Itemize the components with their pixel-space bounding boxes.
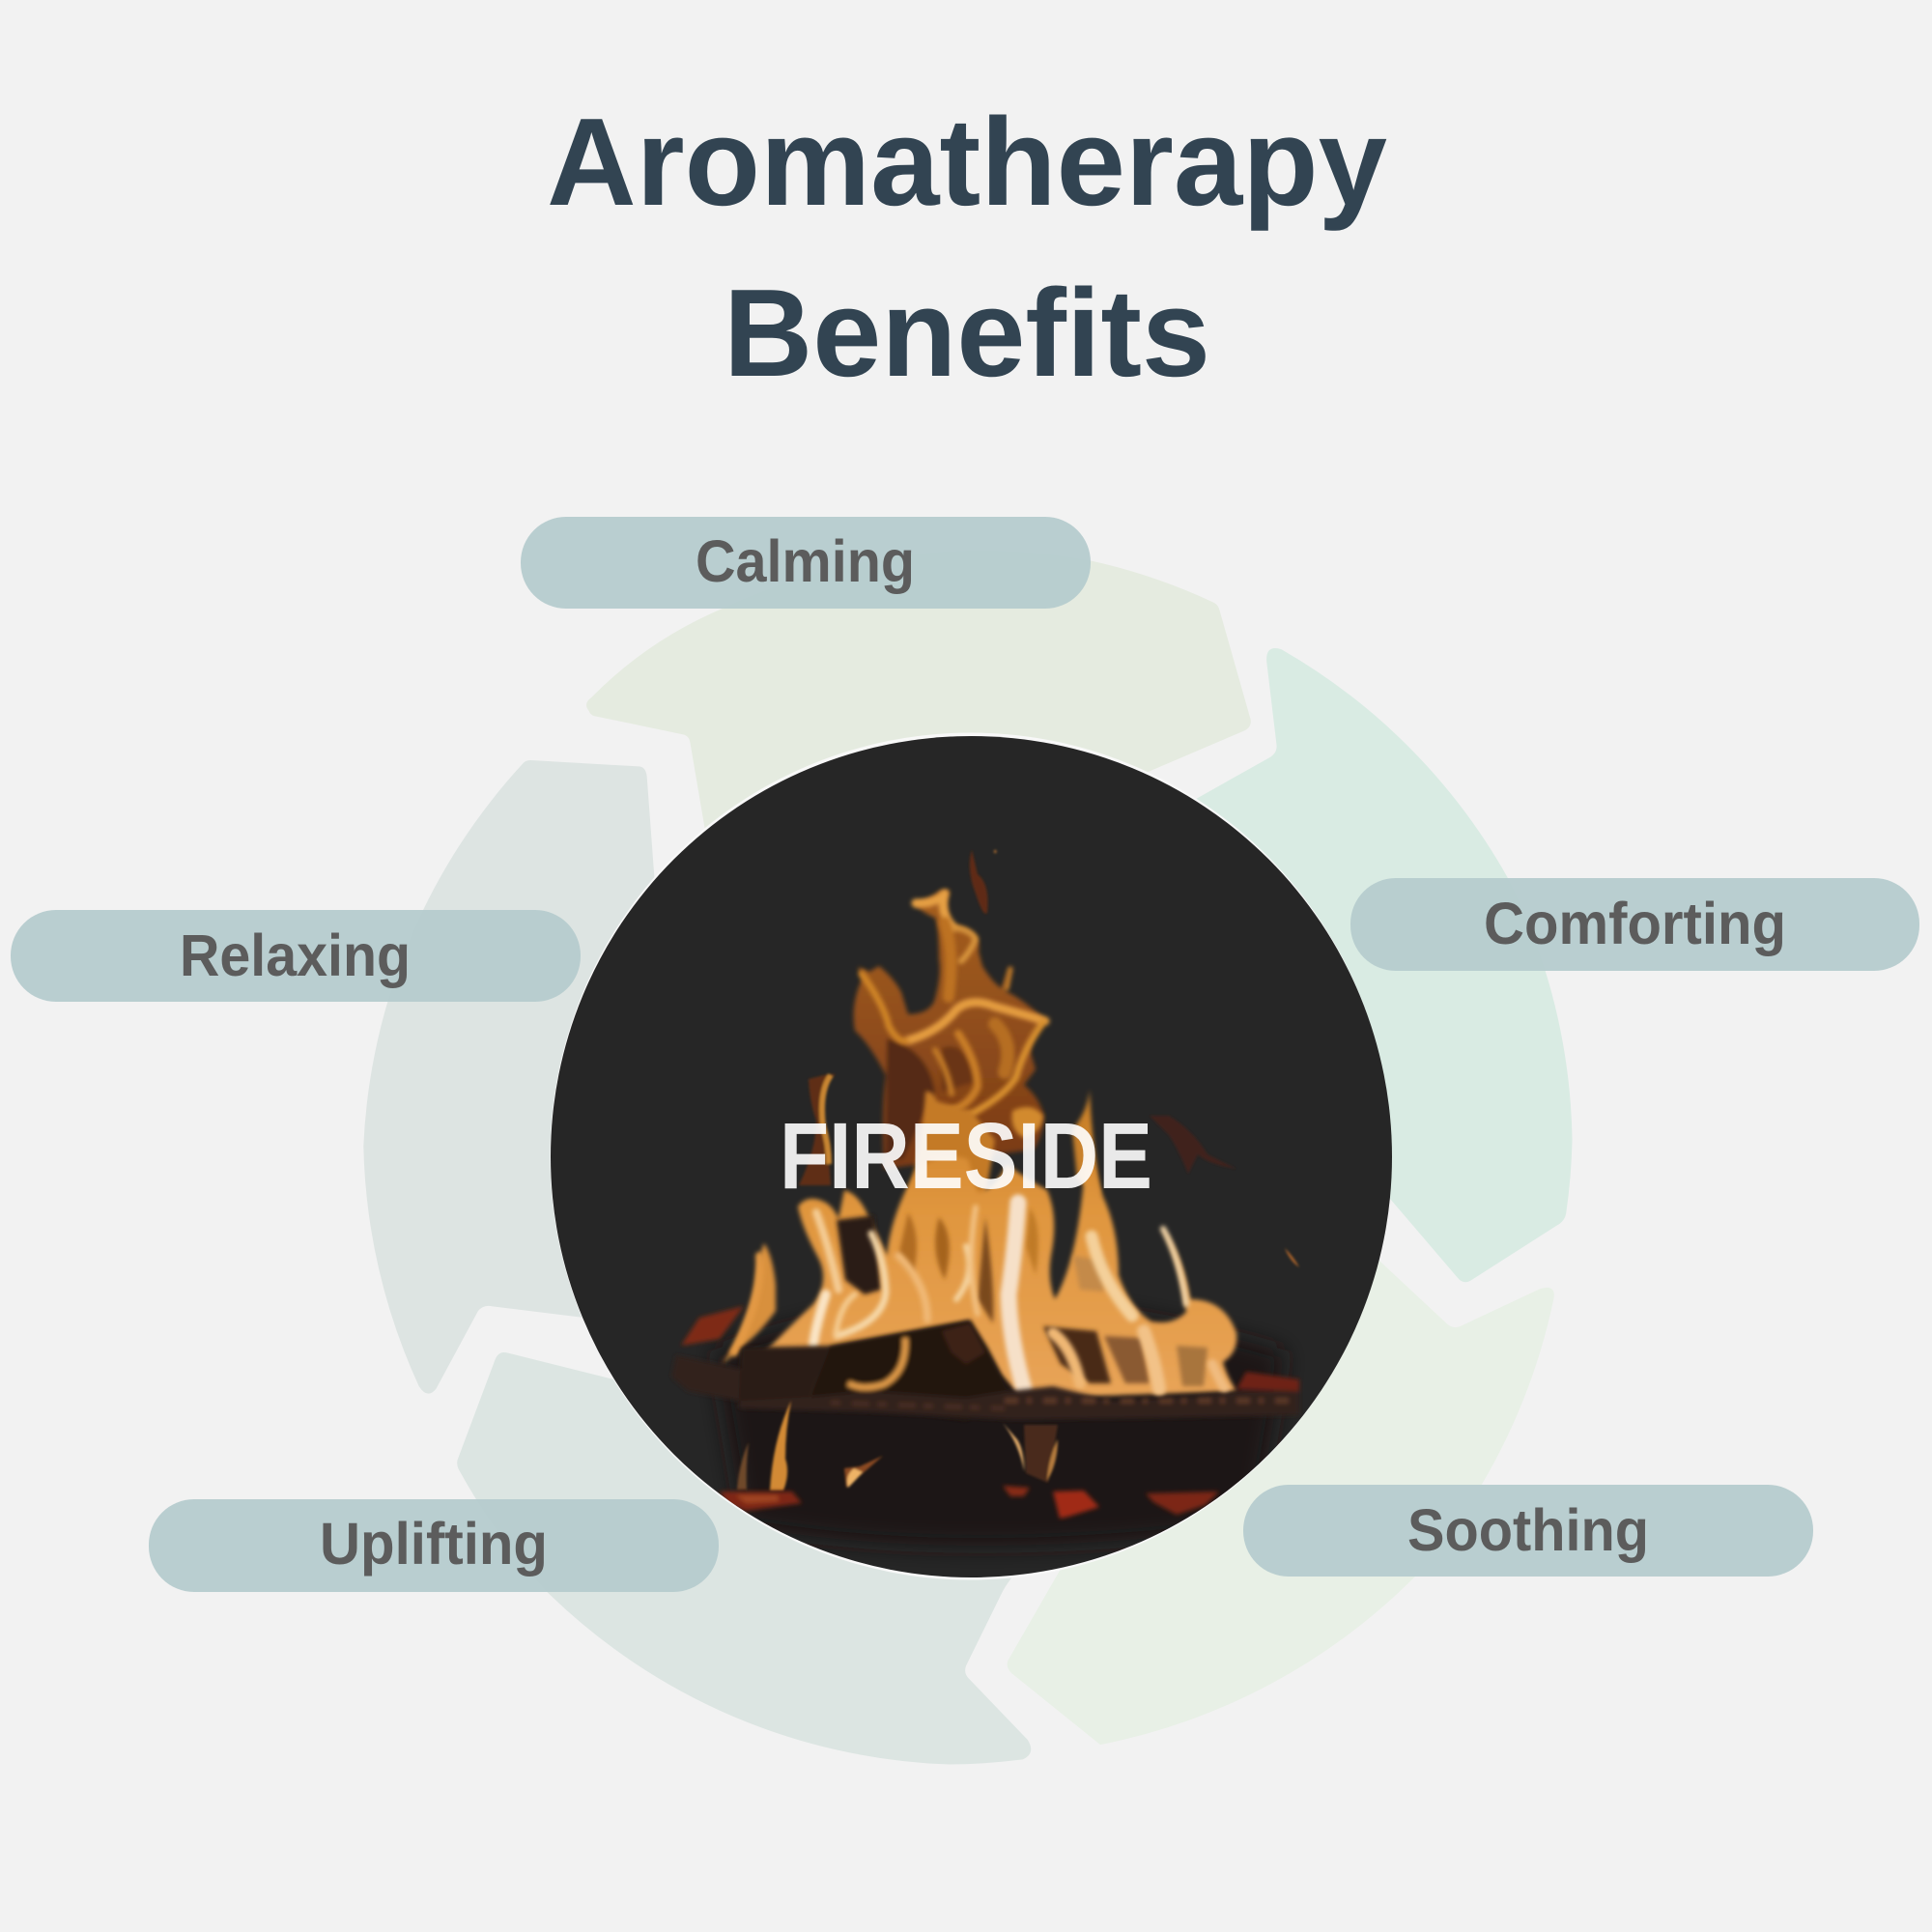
logs xyxy=(671,1306,1299,1420)
arrow: calming segment xyxy=(586,551,1251,850)
arrow: uplifting segment xyxy=(457,1352,1031,1765)
pale rim behind centre circle xyxy=(551,732,1391,1580)
ember glow right of log xyxy=(1236,1372,1299,1391)
flame tongues under log xyxy=(777,1348,821,1401)
lower upper-flame shadow xyxy=(886,1038,935,1159)
dark shadow behind logs xyxy=(715,1304,1285,1546)
pill: Comforting: Comforting xyxy=(1484,891,1786,956)
arrow: soothing segment xyxy=(1008,1238,1554,1745)
arrow: comforting segment xyxy=(1171,648,1573,1282)
pill: Uplifting xyxy=(149,1499,719,1592)
orange blobs above main mass xyxy=(908,1090,1101,1198)
left sliver flame xyxy=(722,1243,776,1365)
small low flames xyxy=(737,1401,1058,1491)
pill: Soothing xyxy=(1243,1485,1813,1577)
pill: Calming: Calming xyxy=(696,528,915,594)
dark disc xyxy=(541,724,1410,1594)
upper flame xyxy=(854,891,1046,1169)
main log xyxy=(809,1318,1009,1399)
title xyxy=(547,93,1387,403)
horizontal log band xyxy=(739,1386,1299,1420)
small spark flames xyxy=(970,850,1299,1267)
centre label: FIRESIDE: FIRESIDE xyxy=(780,1103,1152,1208)
pill: Calming xyxy=(521,517,1091,609)
centre circle: fire image xyxy=(541,724,1410,1594)
pill: Soothing: Soothing xyxy=(1407,1497,1649,1563)
pill: Relaxing: Relaxing xyxy=(180,923,411,988)
ember patch left xyxy=(681,1306,744,1346)
title: Benefits xyxy=(724,264,1210,403)
embers xyxy=(720,1486,1219,1519)
arrow: relaxing segment xyxy=(363,760,671,1394)
pill: Comforting xyxy=(1350,878,1919,971)
small left flame xyxy=(799,1074,836,1185)
bright flame streaks xyxy=(734,1203,1225,1389)
upper flame streaks xyxy=(862,894,1045,1116)
circular arrow ring xyxy=(363,551,1573,1765)
pill: Relaxing xyxy=(11,910,581,1002)
title: Aromatherapy xyxy=(547,93,1387,232)
main flame mass xyxy=(722,1111,1236,1401)
pill: Uplifting: Uplifting xyxy=(320,1511,548,1577)
dark gaps between flames xyxy=(837,1208,1208,1386)
left log xyxy=(671,1355,741,1401)
flame ring on log xyxy=(848,1338,905,1387)
